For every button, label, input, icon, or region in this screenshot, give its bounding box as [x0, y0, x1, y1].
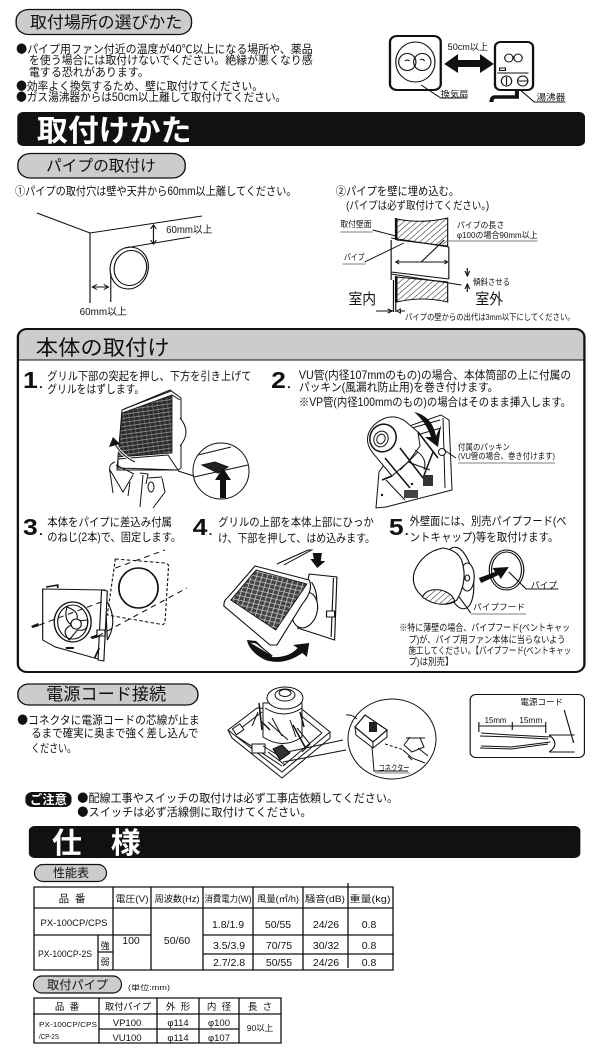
table: mounting pipe: 90以上 [247, 1023, 274, 1033]
table: performance: 50/55 [265, 919, 291, 931]
table: mounting pipe: φ100 [208, 1018, 230, 1029]
table: mounting pipe: 取付パイプ [105, 1002, 151, 1013]
text block: location cautions: ●効率よく換気するため、壁に取付けてください。 [16, 77, 263, 94]
step 3 [23, 516, 187, 661]
title bar: how to install: 取付けかた [37, 114, 192, 147]
table: performance: 消費電力(W) [204, 893, 252, 904]
step 1: グリルをはずします。 [47, 383, 144, 396]
table: performance: 重量(kg) [350, 893, 391, 904]
text block: location cautions: を使う場合には取付けないでください。絶縁が悪くなり感 [29, 53, 313, 67]
table: performance: 30/32 [313, 940, 339, 952]
step 2: パッキン(風漏れ防止用)を巻き付けます。 [299, 380, 498, 394]
illustration: fan body with connector [228, 687, 436, 779]
text: unit note: (単位:mm) [128, 983, 170, 992]
step 3: 本体をパイプに差込み付属 [47, 516, 172, 529]
table: performance: 品 番 [59, 893, 86, 905]
text block: location cautions: ●パイプ用ファン付近の温度が40℃以上になる場所や、薬品 [16, 40, 313, 57]
table: mounting pipe: 内 径 [207, 1001, 232, 1013]
diagram: pipe cross-section: 取付壁面 [340, 219, 372, 229]
text block: location cautions: ●ガス湯沸器からは50cm以上離して取付けてください。 [16, 88, 286, 105]
diagram: pipe cross-section: パイプの長さ [457, 221, 504, 230]
diagram: fan and water heater clearance: 湯沸器 [537, 92, 565, 102]
diagram: fan and water heater clearance: 50cm以上 [448, 42, 488, 53]
table: performance: 50/60 [164, 935, 190, 947]
text: pipe step 2: (パイプは必ず取付けてください。) [346, 199, 489, 212]
table: performance: PX-100CP-2S [38, 949, 92, 959]
text: pipe step 1: ①パイプの取付穴は壁や天井から60mm以上離してください。 [15, 185, 297, 198]
section: embedding pipe in wall [336, 185, 575, 322]
instruction page content [15, 10, 585, 859]
panel frame and header [17, 329, 585, 672]
table: mounting pipe: φ107 [208, 1033, 230, 1044]
illustration: pipe hood: パイプフード [473, 603, 525, 612]
illustration: fan body with connector: コネクター [378, 764, 410, 773]
section: installation location [16, 10, 565, 105]
step 5 [389, 514, 571, 668]
table: mounting pipe: 品 番 [55, 1001, 80, 1013]
table: performance: 3.5/3.9 [213, 940, 245, 952]
pill heading: performance table [34, 864, 106, 882]
table: performance: 24/26 [313, 957, 339, 969]
illustration: pipe hood [413, 546, 558, 614]
text: connector instruction: るまで確実に奥まで強く差し込んで [31, 726, 198, 740]
section: power cord connection [17, 684, 584, 779]
step 5: 5. [389, 516, 409, 541]
table: performance: 風量(㎥/h) [257, 894, 299, 904]
step 3: のねじ(2本)で、固定します。 [47, 531, 181, 544]
panel frame and header: 本体の取付け [36, 336, 170, 360]
illustration: packing on fan cylinder: (VU管の場合、巻き付けます) [458, 451, 555, 461]
pill heading: mounting pipe [34, 976, 122, 993]
table: performance: 強 [100, 940, 110, 951]
caution block [25, 789, 398, 820]
table: performance: 騒音(dB) [305, 893, 345, 904]
diagram: fan and water heater clearance: 換気扇 [441, 89, 468, 99]
pill heading: mounting pipe: 取付パイプ [47, 978, 108, 992]
text: pipe step 2: ②パイプを壁に埋め込む。 [336, 185, 459, 198]
diagram: pipe cross-section: 傾斜させる [473, 277, 510, 287]
step 1 [23, 369, 252, 508]
step 2: 2. [271, 369, 291, 394]
pill heading: power cord: 電源コード接続 [46, 684, 166, 704]
diagram: pipe cross-section: φ100の場合90mm以上 [457, 230, 538, 240]
table: performance: 0.8 [362, 919, 376, 931]
badge: caution: ご注意 [30, 792, 67, 807]
pill heading: pipe installation [18, 154, 185, 178]
section: pipe hole clearance [15, 185, 297, 318]
table: mounting pipe: 長 さ [248, 1002, 272, 1013]
diagram: wall corner with pipe hole: 60mm以上 [166, 225, 212, 236]
illustration: removing grille [109, 390, 249, 508]
pill heading: installation location: 取付場所の選びかた [30, 13, 182, 32]
table: mounting pipe: 外 形 [166, 1001, 191, 1013]
title bar: specifications: 様 [111, 827, 141, 859]
diagram: cord stripping length: 15mm [485, 716, 507, 725]
note: thin wall caution: プ)は別売】 [408, 656, 453, 668]
step 1: グリル下部の突起を押し、下方を引き上げて [47, 369, 252, 383]
text: pipe step 2 [336, 185, 489, 212]
diagram: cord stripping length [470, 694, 584, 758]
text: connector instruction: ●コネクタに電源コードの芯線が止ま [17, 711, 200, 728]
panel: main body installation [17, 329, 585, 672]
illustration: packing on fan cylinder: 付属のパッキン [458, 443, 510, 452]
illustration: fixing body with screws [31, 550, 187, 661]
diagram: cord stripping length: 電源コード [520, 698, 563, 707]
table: performance: 弱 [100, 957, 110, 967]
diagram: wall corner with pipe hole [37, 213, 212, 318]
text: wiring cautions [77, 789, 398, 820]
text: wiring cautions: ●配線工事やスイッチの取付けは必ず工事店依頼してください。 [77, 789, 398, 806]
diagram: pipe cross-section: 室外 [475, 291, 503, 308]
table: mounting pipe: VP100 [113, 1018, 141, 1029]
step 2 [271, 368, 571, 508]
table: performance: 周波数(Hz) [154, 893, 200, 904]
title bar: specifications [29, 826, 580, 859]
text block: location cautions: 電する恐れがあります。 [29, 65, 149, 79]
table: performance: 100 [122, 935, 140, 947]
table: performance: 2.7/2.8 [213, 957, 245, 969]
table: mounting pipe: PX-100CP/CPS [39, 1020, 97, 1029]
table: performance: 0.8 [362, 957, 376, 969]
illustration: attaching grille [224, 550, 337, 662]
table: performance: 24/26 [313, 919, 339, 931]
pill heading: performance table: 性能表 [53, 866, 89, 880]
step 4: 4. [193, 516, 212, 541]
table: performance: 0.8 [362, 940, 376, 952]
table: performance [34, 883, 394, 970]
table: performance: 50/55 [266, 957, 292, 969]
text block: location cautions [16, 40, 313, 105]
table: performance: 電圧(V) [116, 894, 149, 904]
pill heading: pipe installation: パイプの取付け [46, 157, 156, 175]
title bar: specifications: 仕 [52, 827, 82, 859]
illustration: packing on fan cylinder [365, 412, 555, 508]
step 3: 3. [23, 516, 43, 541]
title bar: how to install [17, 112, 585, 147]
illustration: pipe hood: パイプ [531, 581, 557, 590]
table: performance: 1.8/1.9 [212, 919, 244, 931]
step 4: グリルの上部を本体上部にひっか [218, 516, 374, 529]
diagram: fan and water heater clearance [390, 36, 565, 102]
table: mounting pipe: φ114 [167, 1033, 189, 1044]
table: mounting pipe [33, 998, 281, 1044]
diagram: pipe cross-section: パイプ [344, 253, 365, 262]
table: mounting pipe: /CP-2S [39, 1032, 59, 1041]
table: performance: 70/75 [266, 940, 292, 952]
diagram: pipe cross-section [340, 218, 575, 322]
step 1: 1. [23, 369, 43, 394]
text: wiring cautions: ●スイッチは必ず活線側に取付けてください。 [77, 803, 312, 820]
text: connector instruction: ください。 [31, 742, 76, 755]
diagram: wall corner with pipe hole: 60mm以上 [80, 307, 127, 318]
table: mounting pipe: VU100 [112, 1033, 142, 1044]
step 5: ントキャップ)等を取付けます。 [410, 530, 558, 544]
diagram: pipe cross-section: 室内 [348, 291, 376, 308]
step 4: け、下部を押して、はめ込みます。 [218, 532, 375, 545]
pill heading: installation location [16, 10, 192, 34]
table: performance: PX-100CP/CPS [40, 918, 108, 928]
text: connector instruction [17, 711, 200, 755]
step 4 [193, 516, 375, 662]
note: thin wall caution [399, 622, 571, 668]
diagram: cord stripping length: 15mm [519, 716, 542, 725]
table: mounting pipe: φ114 [167, 1018, 189, 1029]
